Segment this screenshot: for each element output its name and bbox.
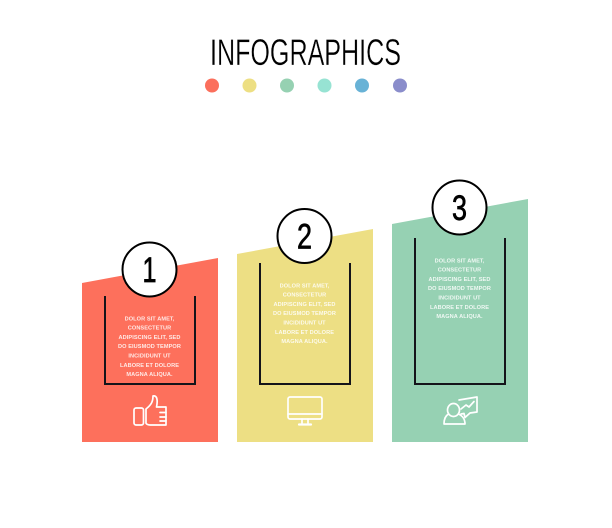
- text block 3: LABORE ET DOLORE: [430, 305, 489, 311]
- number badge 3: [432, 180, 486, 234]
- text block 1: MAGNA ALIQUA.: [126, 372, 173, 378]
- icon: presenter with chart: [444, 397, 477, 424]
- colour dots row: [205, 78, 407, 92]
- number badge 2: [278, 209, 332, 263]
- panel: step 1: [82, 242, 218, 442]
- text block 1: DO EIUSMOD TEMPOR: [118, 344, 181, 350]
- text block 2: [273, 283, 336, 345]
- number badge 1: 1: [142, 251, 156, 290]
- bracket 3: [415, 238, 505, 384]
- number badge 1: [122, 242, 176, 296]
- text block 1: INCIDIDUNT UT: [128, 354, 171, 360]
- text block 3: ADIPISCING ELIT, SED: [429, 277, 490, 283]
- icon: thumbs up: [134, 396, 166, 425]
- text block 2: DOLOR SIT AMET,: [280, 283, 330, 289]
- text block 3: CONSECTETUR: [438, 268, 481, 274]
- text block 2: CONSECTETUR: [283, 293, 326, 299]
- text block 1: LABORE ET DOLORE: [120, 363, 179, 369]
- text block 2: MAGNA ALIQUA.: [281, 339, 328, 345]
- icon: monitor: [288, 397, 322, 424]
- panel: step 2: [237, 209, 373, 442]
- bracket 1: [105, 296, 195, 384]
- text block 3: DO EIUSMOD TEMPOR: [428, 286, 491, 292]
- text block 2: ADIPISCING ELIT, SED: [274, 302, 335, 308]
- panel: step 3: [392, 180, 528, 442]
- text block 1: ADIPISCING ELIT, SED: [119, 335, 180, 341]
- text block 2: LABORE ET DOLORE: [275, 330, 334, 336]
- text block 1: DOLOR SIT AMET,: [125, 316, 175, 322]
- title: INFOGRAPHICS: [210, 32, 401, 73]
- text block 1: [118, 316, 181, 378]
- text block 3: MAGNA ALIQUA.: [436, 314, 483, 320]
- text block 1: CONSECTETUR: [128, 326, 171, 332]
- text block 2: DO EIUSMOD TEMPOR: [273, 311, 336, 317]
- text block 3: DOLOR SIT AMET,: [435, 258, 485, 264]
- text block 3: INCIDIDUNT UT: [438, 296, 481, 302]
- number badge 2: 2: [297, 218, 312, 256]
- text block 3: [428, 258, 491, 320]
- bracket 2: [260, 263, 350, 384]
- text block 2: INCIDIDUNT UT: [283, 320, 326, 326]
- number badge 3: 3: [452, 189, 467, 228]
